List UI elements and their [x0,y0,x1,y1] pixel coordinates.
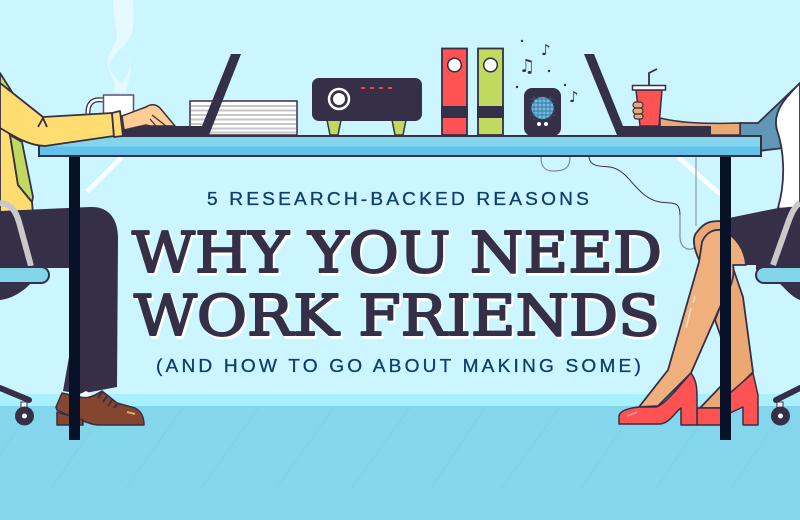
left chair seat [0,267,49,283]
music notes: ♪ [541,41,551,59]
right person: front leg [639,230,746,407]
left person: torso and tie [0,73,33,214]
white table struts [87,157,720,194]
right person: skirt [729,206,800,300]
right laptop [584,54,711,135]
left person: chair [0,203,34,426]
right chair [756,203,800,426]
mug and steam [88,0,134,120]
amplifier [312,78,422,135]
drink cup [632,69,666,126]
floor [0,394,800,520]
left hand [122,105,175,130]
right person: back shoe [697,373,758,425]
right person: shirt and sleeve [740,83,800,215]
tagline: (AND HOW TO GO ABOUT MAKING SOME) [156,356,644,376]
under-desk cables [541,157,696,249]
music notes: ♫ [519,56,535,77]
subtitle: 5 RESEARCH-BACKED REASONS [207,189,592,209]
title shadow [134,224,664,352]
title [132,221,662,349]
right person: back leg [694,221,753,408]
left person: brown shoe [56,391,144,425]
title shadow: WORK FRIENDS [136,287,662,352]
table top [39,136,761,156]
title shadow: WHY YOU NEED [134,224,664,289]
right person: front shoe [619,373,697,425]
title: WORK FRIENDS [134,284,660,349]
music notes [516,40,579,106]
left person: arm and cuff [0,83,123,146]
left laptop [123,54,241,135]
green binder [477,48,504,135]
stack of paper [190,101,297,135]
table legs [69,157,731,440]
music notes: ♪ [569,88,579,106]
right person: forearm [660,118,740,135]
left person: trousers [0,207,118,394]
red binder [441,48,468,135]
speaker [524,88,561,136]
title: WHY YOU NEED [132,221,662,286]
